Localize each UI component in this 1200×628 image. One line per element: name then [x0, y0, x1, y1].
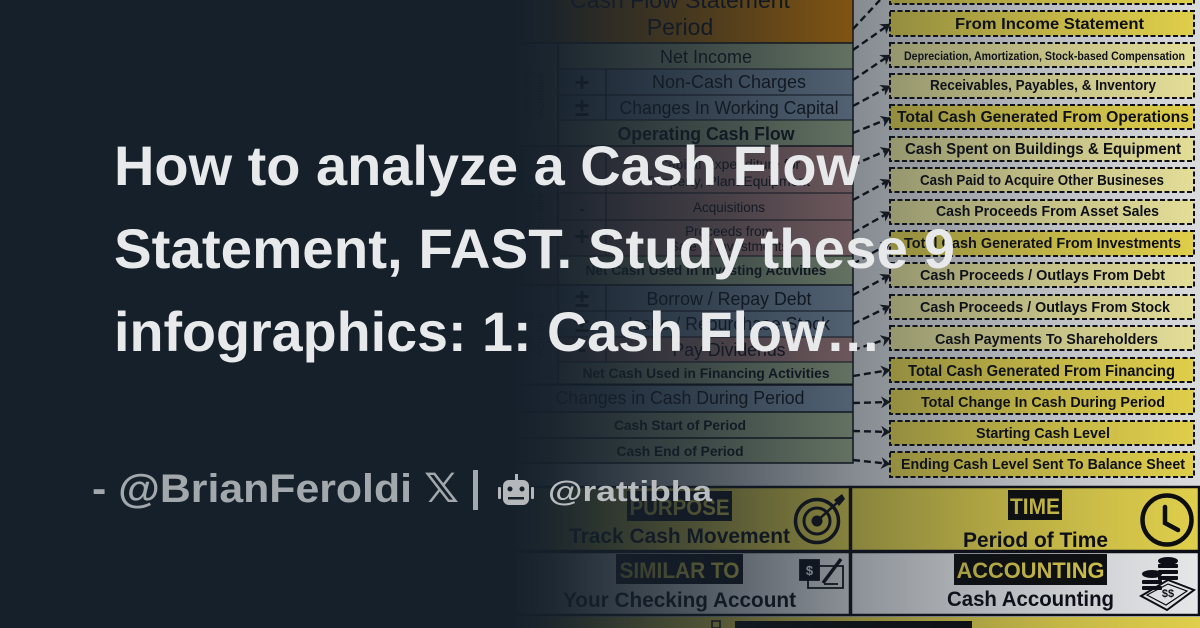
statement table: Capital Expenditure for: [658, 156, 801, 172]
statement table: Changes in Cash During Period: [556, 388, 804, 408]
title: [114, 134, 955, 363]
statement table: [513, 0, 853, 463]
rattibha handle: @rattibha: [548, 476, 713, 508]
panel: similar to: Your Checking Account: [563, 589, 796, 612]
explanation box labels: [897, 16, 1189, 473]
statement header: [513, 0, 853, 43]
statement table: Property, Plant Equipment: [648, 173, 810, 189]
explanation box labels: Starting Cash Level: [976, 425, 1110, 442]
icon: clock: [1142, 496, 1192, 544]
statement table: Cash End of Period: [616, 444, 744, 459]
statement table: Activities: [535, 313, 547, 357]
author attribution: 𝕏: [424, 466, 459, 512]
statement table: Cash Start of Period: [614, 418, 746, 433]
statement table: Activities: [535, 73, 547, 117]
statement table: ±: [575, 283, 589, 313]
title: How to analyze a Cash Flow: [114, 134, 860, 197]
statement table: Pay Dividends: [672, 340, 786, 360]
explanation box labels: Total Cash Generated From Operations: [897, 109, 1189, 126]
explanation box labels: Cash Proceeds From Asset Sales: [936, 203, 1159, 220]
panel: purpose: Track Cash Movement: [569, 525, 790, 548]
bottom strip: [513, 617, 1200, 628]
statement table: +: [574, 221, 590, 251]
statement table: Financing: [522, 311, 534, 359]
icon: robot: [498, 474, 534, 505]
statement table: Net Income: [660, 47, 752, 67]
panel: similar to: SIMILAR TO: [620, 558, 740, 583]
statement table: Borrow / Repay Debt: [646, 289, 812, 309]
icon: check: [800, 559, 843, 588]
statement table: Issue / Repurchase Stock: [628, 314, 831, 334]
panel: time: Period of Time: [963, 529, 1108, 552]
explanation box labels: Cash Proceeds / Outlays From Stock: [920, 299, 1171, 316]
statement table: ±: [575, 308, 589, 338]
statement table: Net Cash Used in Investing Activities: [586, 263, 826, 278]
statement table: Operating: [522, 71, 534, 119]
statement table: -: [579, 201, 585, 218]
statement table: Activities: [535, 193, 547, 237]
statement table: -: [578, 333, 586, 363]
statement table: Changes In Working Capital: [620, 98, 838, 118]
explanation box labels: Cash Paid to Acquire Other Busineses: [920, 172, 1164, 189]
explanation box labels: Receivables, Payables, & Inventory: [930, 78, 1156, 94]
title: infographics: 1: Cash Flow…: [114, 300, 881, 363]
panel: accounting: Cash Accounting: [947, 588, 1114, 611]
explanation box labels: Cash Spent on Buildings & Equipment: [905, 141, 1182, 158]
panel: purpose: [513, 487, 850, 551]
statement table: Non-Cash Charges: [652, 72, 806, 92]
statement table: Sale of Investments: [670, 239, 789, 254]
title: Statement, FAST. Study these 9: [114, 217, 955, 280]
statement table: Net Cash Used in Financing Activities: [582, 366, 830, 381]
panel: purpose: PURPOSE: [630, 495, 730, 520]
icon: coins and banknote: $$: [1162, 588, 1174, 600]
panel: time: TIME: [1010, 494, 1060, 519]
explanation box labels: Total Cash Generated From Investments: [904, 235, 1181, 252]
dashed arrows: [853, 0, 890, 464]
panel: accounting: ACCOUNTING: [956, 558, 1104, 583]
panel: accounting: [851, 552, 1199, 615]
statement table: ±: [575, 92, 589, 122]
statement header: Period: [647, 14, 713, 40]
statement table: Acquisitions: [693, 200, 765, 215]
explanation box labels: Total Cash Generated From Financing: [908, 363, 1175, 380]
panel: similar to: [513, 552, 850, 615]
explanation box labels: Total Change In Cash During Period: [921, 394, 1165, 411]
explanation box labels: Cash Proceeds / Outlays From Debt: [920, 267, 1165, 284]
explanation box labels: Ending Cash Level Sent To Balance Sheet: [901, 456, 1185, 473]
statement table: Proceeds from: [685, 224, 773, 239]
statement table: +: [574, 67, 590, 97]
explanation box labels: From Income Statement: [955, 16, 1145, 33]
icon: check: $: [806, 563, 814, 578]
statement table: Investing: [522, 193, 534, 237]
statement table: Operating Cash Flow: [618, 124, 795, 144]
dark gradient overlay: [510, 0, 1200, 628]
icon: target: [796, 494, 845, 542]
panel: time: [851, 487, 1199, 552]
explanation boxes: [890, 0, 1194, 477]
explanation box labels: Cash Payments To Shareholders: [935, 331, 1158, 348]
icon: coins and banknote: [1141, 557, 1194, 610]
author attribution: - @BrianFeroldi: [92, 467, 412, 511]
background infographic image: [510, 0, 1200, 628]
